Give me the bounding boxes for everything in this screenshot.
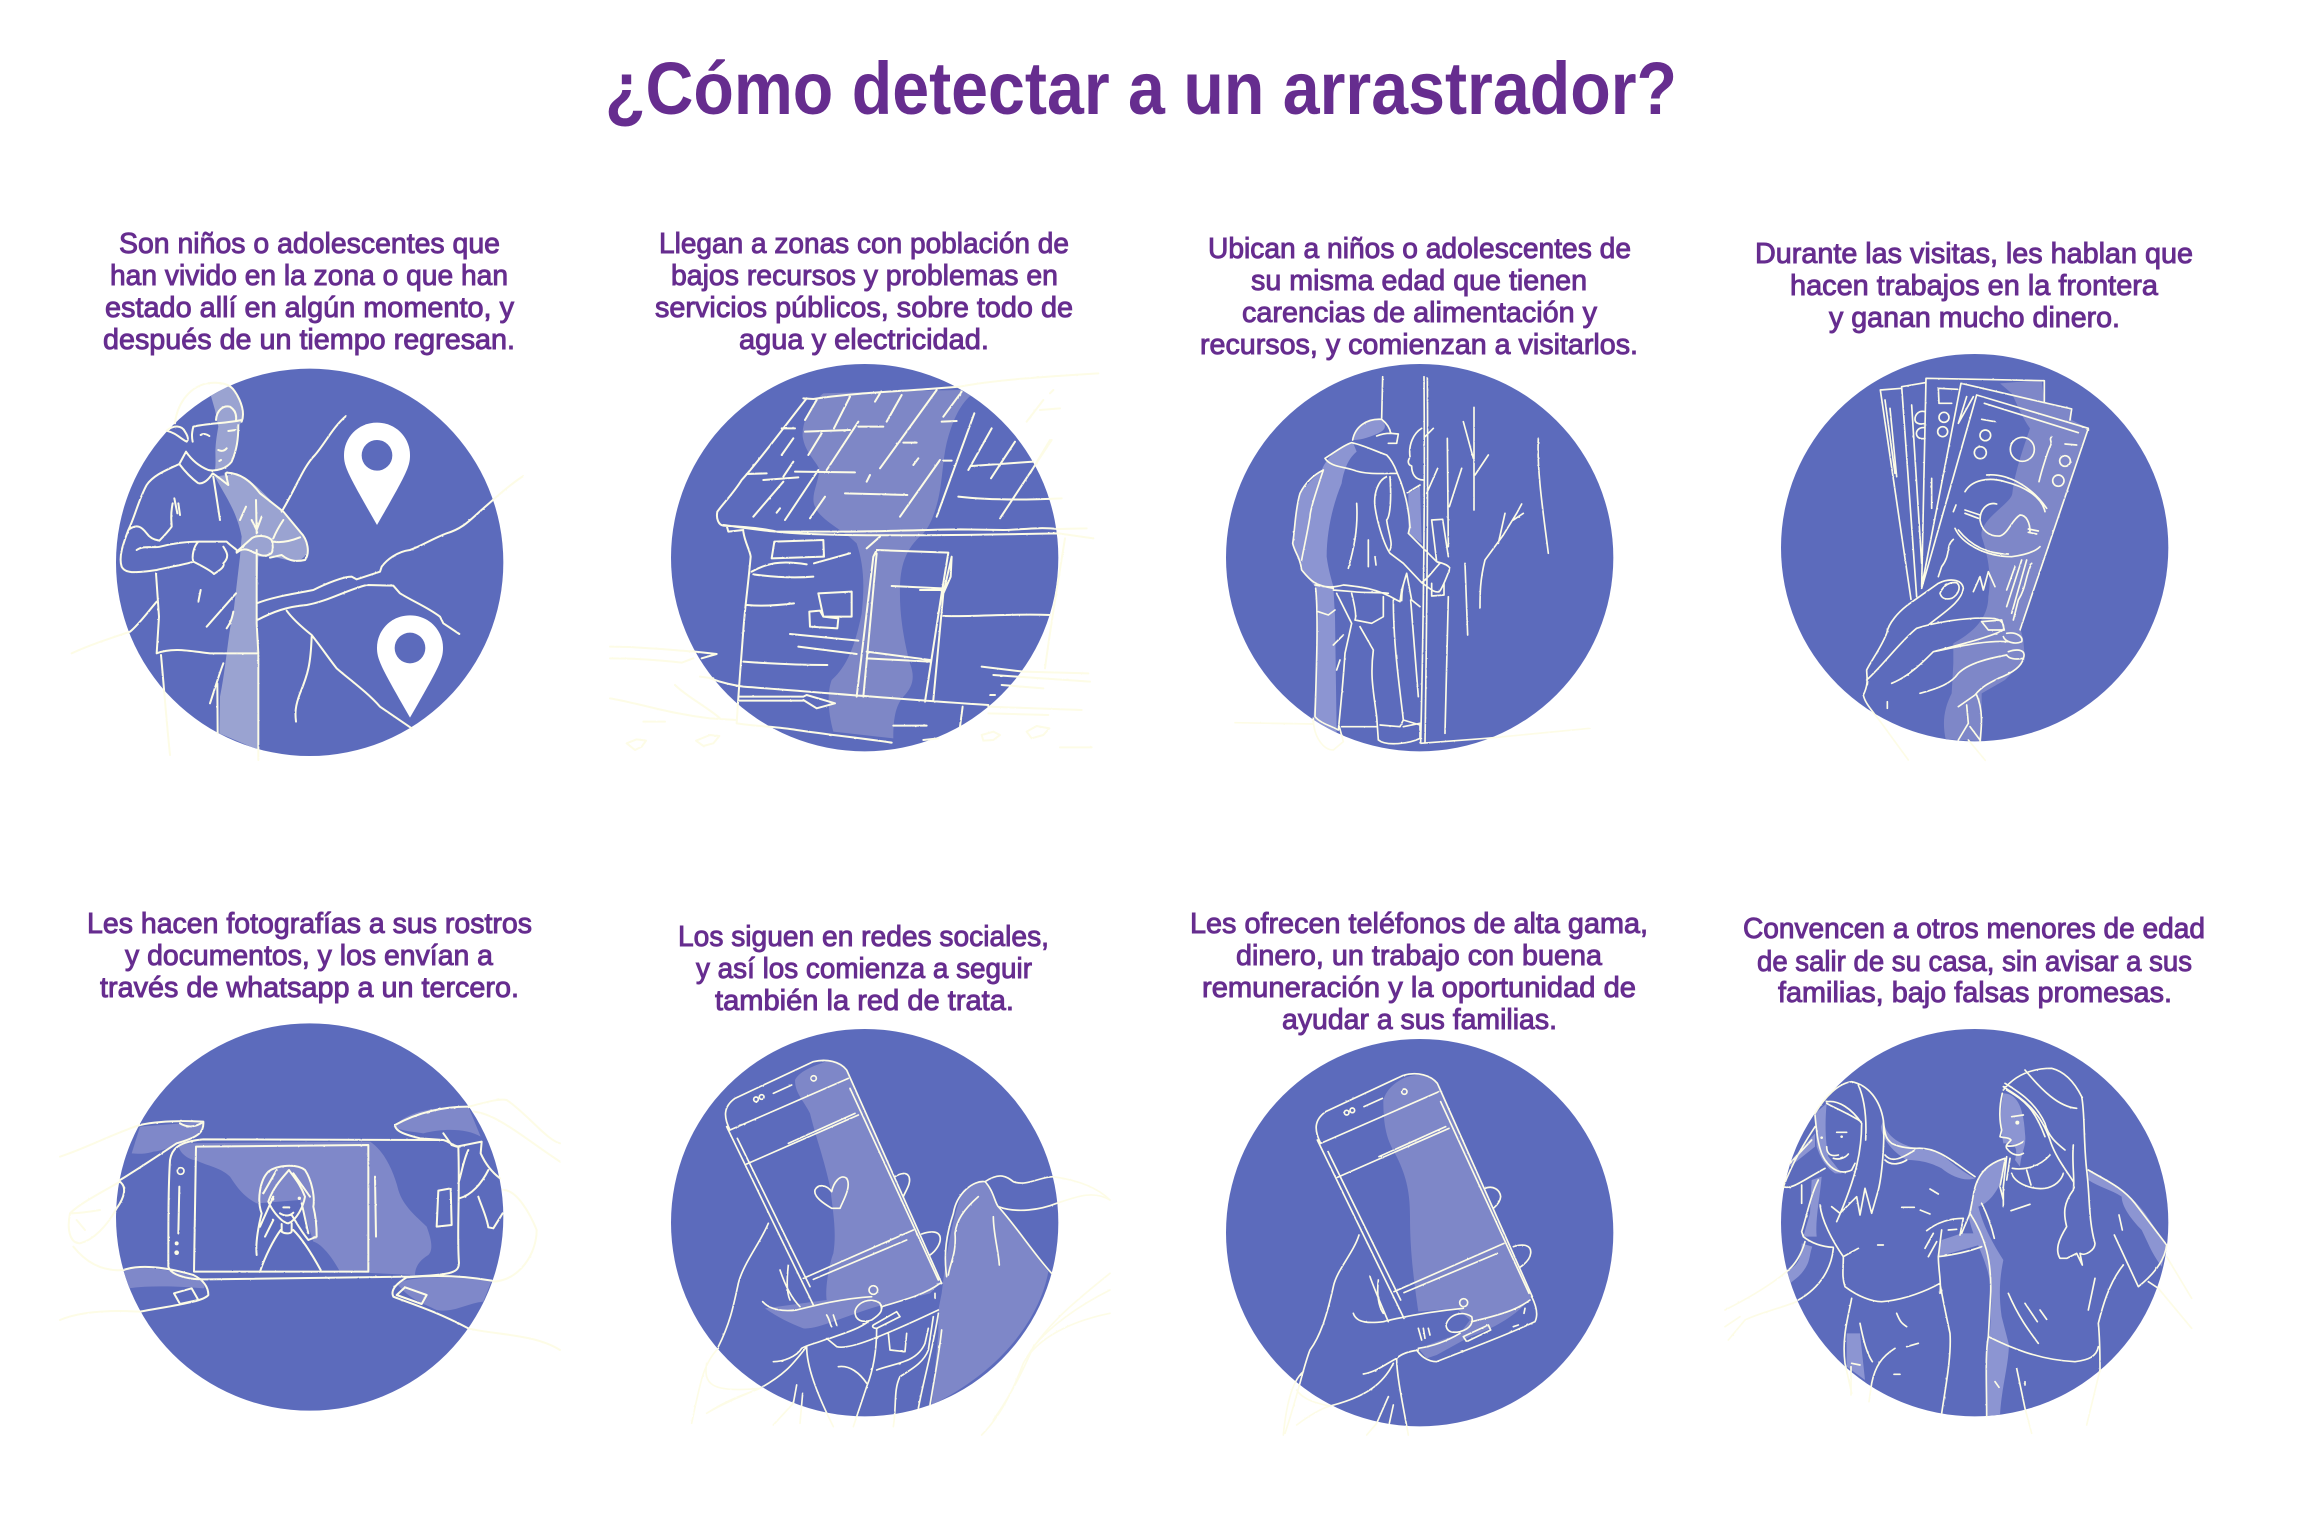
text: fotografías: y documentos, y los envían a [125,940,494,972]
text: redes sociales: también la red de trata. [715,985,1014,1017]
text: regresan a la zona: Son niños o adolescentes que [119,228,500,260]
text: fotografías: Les hacen fotografías a sus rostros [87,908,532,940]
text: convencen a otros menores: de salir de su casa, sin avisar a sus [1757,946,2192,978]
icon: chico con mapa y marcadores [72,369,523,760]
title: ¿Cómo detectar a un arrastrador? [605,47,1677,130]
text: convencen a otros menores: Convencen a otros menores de edad [1743,913,2205,945]
text: regresan a la zona: después de un tiempo regresan. [103,324,515,356]
text: zonas de bajos recursos: bajos recursos y problemas en [671,260,1058,292]
text: hablan de la frontera: hacen trabajos en la frontera [1790,270,2159,302]
text: ubican y visitan: Ubican a niños o adolescentes de [1208,233,1631,265]
panel: zonas de bajos recursos [610,228,1098,751]
text: redes sociales [678,921,1049,1017]
text: ubican y visitan: recursos, y comienzan a visitarlos. [1200,329,1638,361]
panel: fotografías [60,908,560,1411]
text: hablan de la frontera [1755,238,2193,334]
text: ofrecen teléfonos: remuneración y la oportunidad de [1202,972,1636,1004]
text: hablan de la frontera: y ganan mucho dinero. [1829,302,2120,334]
text: ofrecen teléfonos: Les ofrecen teléfonos de alta gama, [1190,908,1648,940]
text: zonas de bajos recursos: Llegan a zonas con población de [659,228,1069,260]
text: regresan a la zona: han vivido en la zona o que han [110,260,508,292]
icon: dos adolescentes caminando [1725,1029,2192,1433]
text: redes sociales: Los siguen en redes sociales, [678,921,1049,953]
panel: hablan de la frontera [1755,238,2193,760]
text: hablan de la frontera: Durante las visitas, les hablan que [1755,238,2193,270]
text: convencen a otros menores: familias, bajo falsas promesas. [1778,977,2172,1009]
icon: teléfono con corazón [671,1029,1110,1435]
text: regresan a la zona: estado allí en algún momento, y [105,292,514,324]
icon: marcador de mapa inferior [377,615,443,718]
panel: regresan a la zona [72,228,523,760]
text: ubican y visitan: carencias de alimentación y [1242,297,1597,329]
text: ofrecen teléfonos: dinero, un trabajo con buena [1236,940,1603,972]
icon: teléfono tomando foto [60,1023,560,1411]
text: fotografías: través de whatsapp a un tercero. [100,972,519,1004]
icon: mano con teléfono [1226,1039,1613,1435]
icon: marcador de mapa superior [344,423,410,525]
icon: hombre en la puerta [1226,364,1613,751]
text: redes sociales: y así los comienza a seguir [696,953,1032,985]
text: fotografías [87,908,532,1004]
icon: mano con billetes [1781,354,2168,760]
text: zonas de bajos recursos: servicios públicos, sobre todo de [655,292,1073,324]
panel: ubican y visitan [1200,233,1638,751]
text: ubican y visitan: su misma edad que tienen [1251,265,1587,297]
text: ubican y visitan [1200,233,1638,361]
panel: ofrecen teléfonos [1190,908,1648,1435]
text: zonas de bajos recursos: agua y electricidad. [739,324,989,356]
text: regresan a la zona [103,228,515,356]
text: ofrecen teléfonos [1190,908,1648,1036]
panel: convencen a otros menores [1725,913,2205,1433]
text: zonas de bajos recursos [655,228,1073,356]
panel: redes sociales [671,921,1110,1435]
icon: casa precaria [610,364,1098,751]
text: convencen a otros menores [1743,913,2205,1009]
text: ofrecen teléfonos: ayudar a sus familias. [1282,1004,1557,1036]
